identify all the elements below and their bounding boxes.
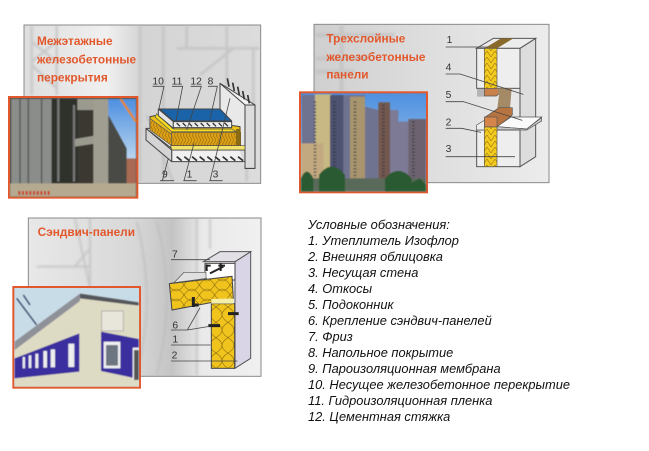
panel: sandwich panels	[13, 218, 261, 388]
legend: 11. Гидроизоляционная пленка	[308, 393, 492, 408]
legend: 5. Подоконник	[308, 297, 394, 312]
callout numbers: 9	[162, 170, 168, 181]
callout numbers: 7	[172, 249, 178, 260]
panel background	[24, 25, 261, 183]
legend: 7. Фриз	[308, 329, 353, 344]
heading: панели	[326, 68, 369, 82]
heading: железобетонные	[36, 52, 137, 66]
photo: building under construction	[9, 97, 137, 198]
heading: Сэндвич-панели	[38, 225, 135, 239]
panel: interfloor concrete slabs	[9, 25, 261, 198]
callout numbers: 3	[213, 170, 219, 181]
diagram: panel joint	[169, 252, 251, 368]
legend: 2. Внешняя облицовка	[307, 249, 443, 264]
callout numbers	[171, 249, 237, 361]
callout numbers: 8	[208, 76, 214, 87]
callout numbers	[152, 76, 230, 181]
panel: three-layer concrete panels	[300, 24, 549, 192]
callout numbers: 1	[447, 35, 453, 46]
callout numbers: 2	[446, 117, 452, 128]
callout numbers: 1	[172, 334, 178, 345]
callout numbers: 11	[172, 76, 183, 87]
callout numbers: 10	[152, 76, 164, 87]
legend: 1. Утеплитель Изофлор	[308, 233, 459, 248]
legend: 8. Напольное покрытие	[308, 345, 453, 360]
diagram: floor slab layers	[146, 78, 255, 168]
legend: 12. Цементная стяжка	[308, 409, 450, 424]
callout numbers: 4	[446, 63, 452, 74]
legend: 10. Несущее железобетонное перекрытие	[308, 377, 570, 392]
callout numbers: 3	[446, 144, 452, 155]
legend: 9. Пароизоляционная мембрана	[308, 361, 501, 376]
diagram: wall section with window	[477, 38, 542, 167]
legend: Условные обозначения:	[307, 217, 450, 232]
legend: 3. Несущая стена	[308, 265, 418, 280]
legend: 4. Откосы	[308, 281, 373, 296]
callout numbers: 12	[190, 76, 202, 87]
callout numbers: 1	[187, 170, 193, 181]
heading: железобетонные	[325, 50, 426, 64]
heading: Трехслойные	[326, 32, 406, 46]
panel background	[314, 24, 549, 183]
callout numbers	[446, 35, 523, 157]
heading: перекрытия	[37, 70, 108, 84]
panel background	[28, 218, 261, 376]
callout numbers: 5	[446, 90, 452, 101]
heading: Межэтажные	[37, 34, 113, 48]
callout numbers: 2	[172, 350, 178, 361]
photo: high-rise towers	[300, 92, 427, 192]
legend: 6. Крепление сэндвич-панелей	[308, 313, 492, 328]
photo: building with blue panels	[13, 287, 140, 388]
callout numbers: 6	[172, 320, 178, 331]
